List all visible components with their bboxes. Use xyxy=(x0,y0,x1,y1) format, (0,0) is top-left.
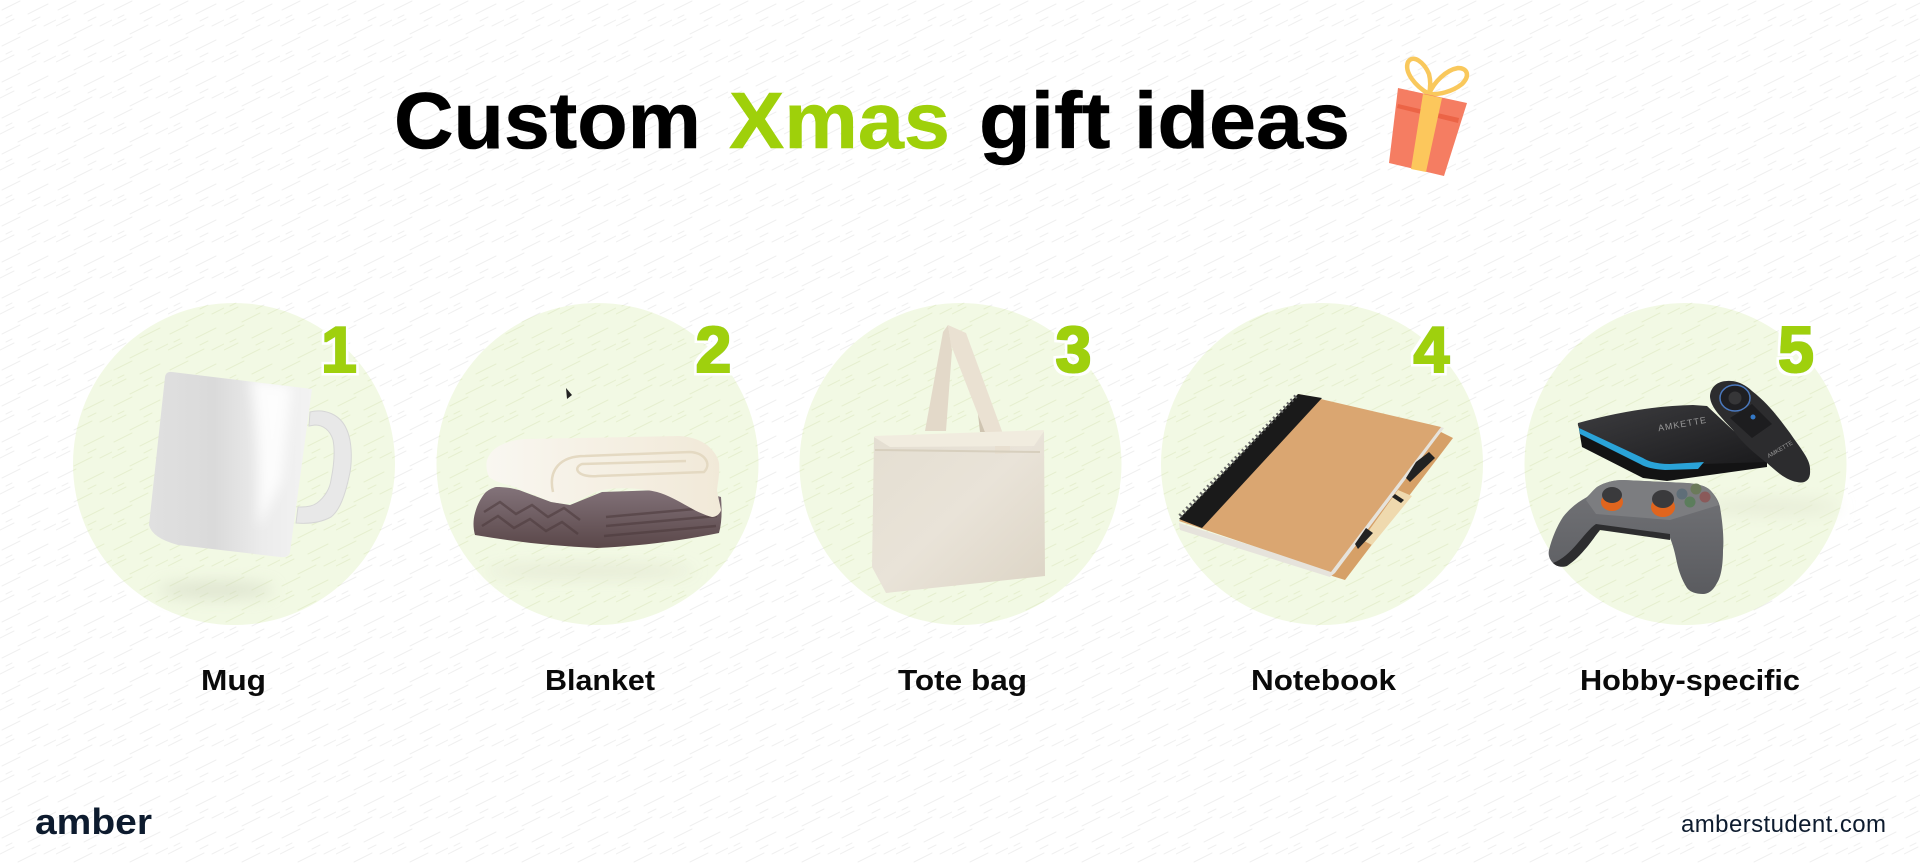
inner strap xyxy=(977,405,990,432)
blanket shadow xyxy=(485,564,695,578)
label: Mug: Mug xyxy=(201,665,266,697)
cream blanket roll xyxy=(552,452,707,492)
page block xyxy=(1179,427,1444,577)
panel: notebook xyxy=(1161,303,1483,697)
controller face xyxy=(1586,480,1719,520)
title: Custom xyxy=(394,76,701,165)
label: Hobby-specific: Hobby-specific xyxy=(1580,665,1800,697)
circle texture xyxy=(1524,303,1846,625)
right thumbstick xyxy=(1651,497,1675,517)
title: Xmas xyxy=(729,76,950,165)
pen body xyxy=(1362,490,1412,545)
face buttons xyxy=(1676,484,1710,508)
number 3: 3 xyxy=(1055,313,1092,386)
media box xyxy=(1578,405,1767,481)
panel: mug xyxy=(73,303,395,697)
title xyxy=(394,76,1350,165)
right strap xyxy=(948,325,1010,458)
logo: amber: amber xyxy=(35,801,152,842)
left strap xyxy=(925,325,952,431)
circle background xyxy=(1161,303,1483,625)
tote body xyxy=(872,431,1045,593)
panel: tote bag xyxy=(800,303,1122,697)
mug highlight xyxy=(251,382,288,510)
upper cream blanket xyxy=(486,436,721,517)
panel: blanket xyxy=(436,303,758,697)
remote button pad xyxy=(1730,404,1772,438)
game controller xyxy=(1549,480,1723,594)
remote body xyxy=(1710,381,1810,482)
label: Blanket: Blanket xyxy=(545,665,655,697)
circle texture xyxy=(1161,303,1483,625)
circle background xyxy=(1524,303,1846,625)
back board xyxy=(1329,432,1453,580)
spiral binding xyxy=(1178,396,1296,518)
tote handles xyxy=(925,325,1010,458)
black spine xyxy=(1179,394,1322,528)
number 5: 5 xyxy=(1778,313,1814,386)
pen top clip xyxy=(1406,452,1435,482)
remote control xyxy=(1710,381,1810,482)
pen band xyxy=(1392,494,1404,503)
left thumbstick cap xyxy=(1602,487,1622,503)
pen tip xyxy=(1355,528,1373,549)
title: gift ideas xyxy=(979,76,1350,165)
mug shadow xyxy=(158,582,274,598)
number 4: 4 xyxy=(1413,313,1450,386)
button east xyxy=(1700,492,1710,502)
button south xyxy=(1684,496,1696,508)
left thumbstick xyxy=(1601,493,1623,511)
remote label: AMKETTE xyxy=(1767,440,1794,460)
remote blue button xyxy=(1750,414,1756,420)
label: Tote bag: Tote bag xyxy=(898,665,1027,697)
right thumbstick cap xyxy=(1652,490,1674,508)
box top xyxy=(1578,405,1767,465)
icon: gift box xyxy=(1389,59,1467,176)
remote ring xyxy=(1720,385,1750,411)
number 2: 2 xyxy=(695,313,732,386)
box front xyxy=(1578,423,1767,481)
lower brown blanket xyxy=(474,487,722,548)
controller body xyxy=(1549,480,1723,594)
floor shadow xyxy=(1700,500,1840,514)
mug body xyxy=(149,372,312,557)
controller underside xyxy=(1553,524,1670,567)
circle texture xyxy=(800,303,1122,625)
number 1: 1 xyxy=(321,313,357,386)
button west xyxy=(1676,488,1688,500)
box label: AMKETTE xyxy=(1657,415,1708,433)
blue light strip xyxy=(1579,428,1704,470)
brown blanket ridges xyxy=(482,502,717,536)
circle background xyxy=(73,303,395,625)
mug handle xyxy=(296,411,351,523)
website url: amberstudent.com xyxy=(1681,811,1886,838)
tote seam xyxy=(875,450,1040,452)
cursor xyxy=(566,388,572,399)
circle texture xyxy=(73,303,395,625)
circle background xyxy=(800,303,1122,625)
tote front strap xyxy=(995,446,1010,454)
panel: hobby-specific xyxy=(1524,303,1846,697)
button north xyxy=(1690,484,1702,494)
circle background xyxy=(436,303,758,625)
circle texture xyxy=(436,303,758,625)
remote centre button xyxy=(1728,392,1742,404)
label: Notebook: Notebook xyxy=(1251,665,1397,697)
tote inner rim xyxy=(874,430,1044,448)
kraft cover xyxy=(1179,394,1441,572)
pen xyxy=(1355,452,1435,549)
